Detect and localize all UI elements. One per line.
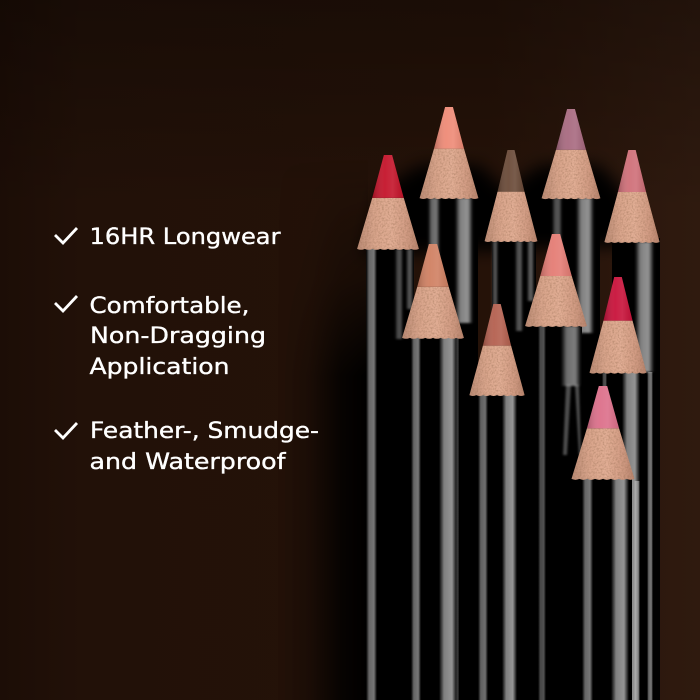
pencil: back row mauve (542, 109, 600, 700)
feature: comfortable application: Comfortable, (90, 294, 250, 319)
feature: waterproof (55, 419, 319, 475)
feature: comfortable application: Application (90, 355, 230, 380)
pencil shadow (306, 159, 636, 700)
pencil: back row salmon (420, 107, 478, 700)
feature: waterproof: and Waterproof (90, 450, 287, 475)
feature: comfortable application (55, 294, 266, 380)
pencil: front row rose brown (469, 304, 525, 700)
pencil: back row red (357, 155, 419, 700)
pencil: back row brown (485, 150, 537, 700)
feature: 16HR Longwear: 16HR Longwear (90, 225, 282, 250)
pencil: front row crimson (590, 277, 646, 700)
pencil: front row coral (525, 234, 587, 700)
feature: comfortable application: Non-Dragging (90, 324, 266, 349)
feature: waterproof: Feather-, Smudge- (90, 419, 319, 444)
pencil: back row pink (604, 150, 660, 700)
feature list (55, 225, 319, 475)
pencil: front pink (572, 386, 640, 700)
pencil: front row salmon brown (402, 244, 464, 700)
